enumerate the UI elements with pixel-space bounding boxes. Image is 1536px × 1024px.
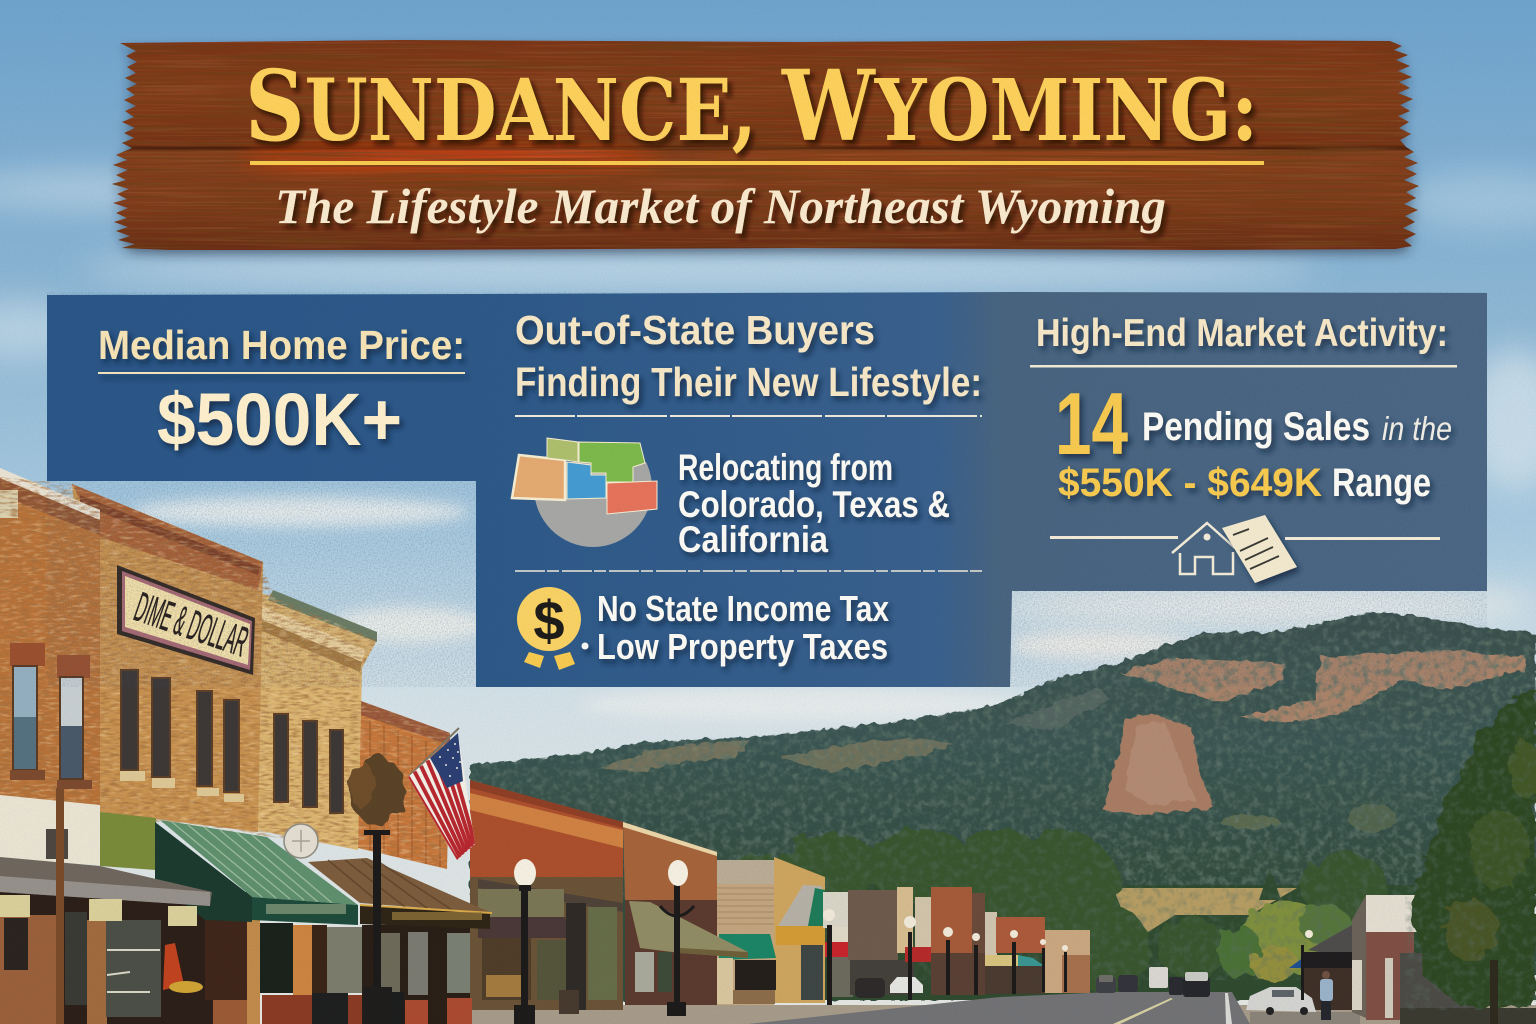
text: relocating from <box>678 447 950 560</box>
divider <box>98 372 465 374</box>
text: tax benefits <box>582 588 889 667</box>
brick texture <box>0 470 450 870</box>
panel: high-end market activity <box>1030 312 1457 583</box>
stat: price range: $550K - $649K <box>1058 461 1322 505</box>
sign: Dime & Dollar <box>117 565 255 675</box>
heading: median home price: Median Home Price: <box>98 322 465 368</box>
ornamental street lamps <box>514 859 1313 1024</box>
divider <box>515 415 982 417</box>
valley field and tree lines <box>715 830 1420 1000</box>
divider <box>1030 365 1457 368</box>
wooden title sign <box>100 30 1430 260</box>
stat: 14 pending sales <box>1055 374 1452 473</box>
white truck parked in the distance <box>890 977 923 993</box>
right side buildings and big tree <box>1289 687 1536 1024</box>
value: $500K+: $500K+ <box>157 378 402 461</box>
stat: price range: Range <box>1332 461 1431 505</box>
storefront windows <box>470 877 623 1010</box>
cliffs <box>600 650 1526 832</box>
title underline <box>250 161 1264 165</box>
cream brick building <box>257 590 377 850</box>
panel: out-of-state buyers <box>512 307 982 670</box>
orange brick building <box>358 700 450 869</box>
road and sidewalk <box>470 992 1536 1024</box>
utility pole <box>56 788 64 1024</box>
far brick buildings behind the flag <box>470 780 775 1014</box>
heading: out-of-state buyers <box>515 307 982 405</box>
upper floor windows <box>10 643 343 813</box>
stat: 14 pending sales: in the <box>1382 410 1452 447</box>
heading: out-of-state buyers: Finding Their New Lifestyle: <box>515 359 982 405</box>
butte <box>1103 713 1214 815</box>
icon: house and document <box>1172 515 1297 583</box>
leftmost brick building <box>0 468 100 815</box>
tan brick building with cornice <box>72 484 263 832</box>
text: relocating from: California <box>678 519 828 560</box>
heading: high-end market activity: High-End Market Activity: <box>1036 312 1448 355</box>
icon: map of western states <box>512 429 657 547</box>
stat: 14 pending sales: Pending Sales <box>1142 405 1370 449</box>
panel: stats background <box>47 292 1487 687</box>
brown awning <box>308 858 492 929</box>
panel: median home price <box>98 322 465 461</box>
text: relocating from: Relocating from <box>678 447 893 488</box>
divider <box>515 570 982 572</box>
American flag <box>408 728 475 860</box>
street clock <box>284 824 318 858</box>
title: SUNDANCE, WYOMING: <box>245 49 1258 163</box>
distant storefronts receding down the street <box>717 857 1090 1005</box>
heading: out-of-state buyers: Out-of-State Buyers <box>515 307 875 353</box>
stat: 14 pending sales: 14 <box>1055 374 1128 473</box>
subtitle: The Lifestyle Market of Northeast Wyoming <box>275 178 1166 234</box>
mountain with butte and cliffs <box>470 612 1536 1000</box>
text: tax benefits: Low Property Taxes <box>597 626 888 667</box>
grey awning with hanging signs <box>0 857 212 926</box>
green striped awning <box>155 820 358 925</box>
text: DIME & DOLLAR <box>129 583 254 665</box>
icon: dollar medal: $ <box>533 589 565 652</box>
cars on the street <box>1096 967 1333 1020</box>
divider <box>1050 536 1440 540</box>
text: relocating from: Colorado, Texas & <box>678 484 950 525</box>
text: tax benefits: No State Income Tax <box>597 588 889 629</box>
lamp post and bare tree <box>349 756 405 1024</box>
ground floor storefronts <box>0 795 472 1024</box>
icon: dollar medal <box>517 587 581 670</box>
